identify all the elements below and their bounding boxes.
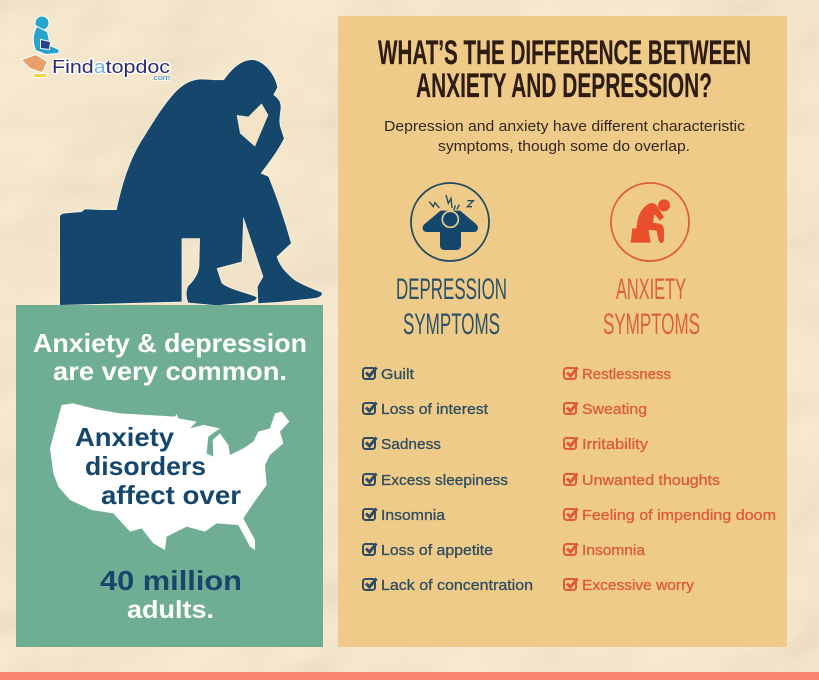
statistic: 40 million: 40 million xyxy=(100,565,242,596)
list: anxiety symptoms: Irritability xyxy=(582,436,649,453)
list: depression symptoms: Lack of concentration xyxy=(381,577,533,594)
heading: anxiety symptoms: ANXIETY xyxy=(616,273,686,306)
list: depression symptoms: Guilt xyxy=(381,366,415,383)
checkboxes: anxiety xyxy=(564,368,578,590)
text: adults: adults. xyxy=(127,596,214,624)
list: anxiety symptoms xyxy=(582,366,776,594)
map: United States xyxy=(50,403,289,550)
logo: Findatopdoc xyxy=(22,16,170,82)
heading: very common xyxy=(33,328,307,386)
panel: green statistic xyxy=(16,305,323,647)
wordmark: Find atopdoc xyxy=(52,56,170,77)
intro text: symptoms, though some do overlap. xyxy=(438,139,690,155)
list: depression symptoms xyxy=(381,366,533,594)
heading: depression symptoms: SYMPTOMS xyxy=(403,308,500,341)
silhouette: man sitting on briefcase xyxy=(60,60,322,305)
intro text xyxy=(384,119,745,155)
heading: very common: are very common. xyxy=(53,356,287,386)
title xyxy=(378,34,751,105)
heading: anxiety symptoms: SYMPTOMS xyxy=(603,308,700,341)
list: depression symptoms: Insomnia xyxy=(381,507,446,524)
list: anxiety symptoms: Insomnia xyxy=(582,542,646,559)
text on map xyxy=(75,422,241,510)
intro text: Depression and anxiety have different characteristic xyxy=(384,119,745,135)
icon: anxiety seated figure xyxy=(611,183,689,261)
list: depression symptoms: Loss of interest xyxy=(381,401,489,418)
list: depression symptoms: Loss of appetite xyxy=(381,542,493,559)
list: anxiety symptoms: Sweating xyxy=(582,401,647,418)
text on map: disorders xyxy=(85,451,206,481)
list: anxiety symptoms: Excessive worry xyxy=(582,577,695,594)
list: anxiety symptoms: Unwanted thoughts xyxy=(582,472,720,489)
panel: orange comparison background xyxy=(338,16,787,647)
list: depression symptoms: Sadness xyxy=(381,436,441,453)
heading: anxiety symptoms xyxy=(603,273,700,341)
text on map: Anxiety xyxy=(75,422,175,452)
heading: depression symptoms xyxy=(396,273,507,341)
heading: very common: Anxiety & depression xyxy=(33,328,307,358)
heading: depression symptoms: DEPRESSION xyxy=(396,273,507,306)
icon: depression head in hands xyxy=(411,183,489,261)
footer bar xyxy=(0,672,819,680)
list: depression symptoms: Excess sleepiness xyxy=(381,472,508,489)
text on map: affect over xyxy=(101,480,241,510)
list: anxiety symptoms: Restlessness xyxy=(582,366,671,383)
wordmark suffix: .com xyxy=(151,75,170,82)
list: anxiety symptoms: Feeling of impending doom xyxy=(582,507,776,524)
icon: duck mascot xyxy=(22,16,59,77)
checkboxes: depression xyxy=(363,368,376,590)
